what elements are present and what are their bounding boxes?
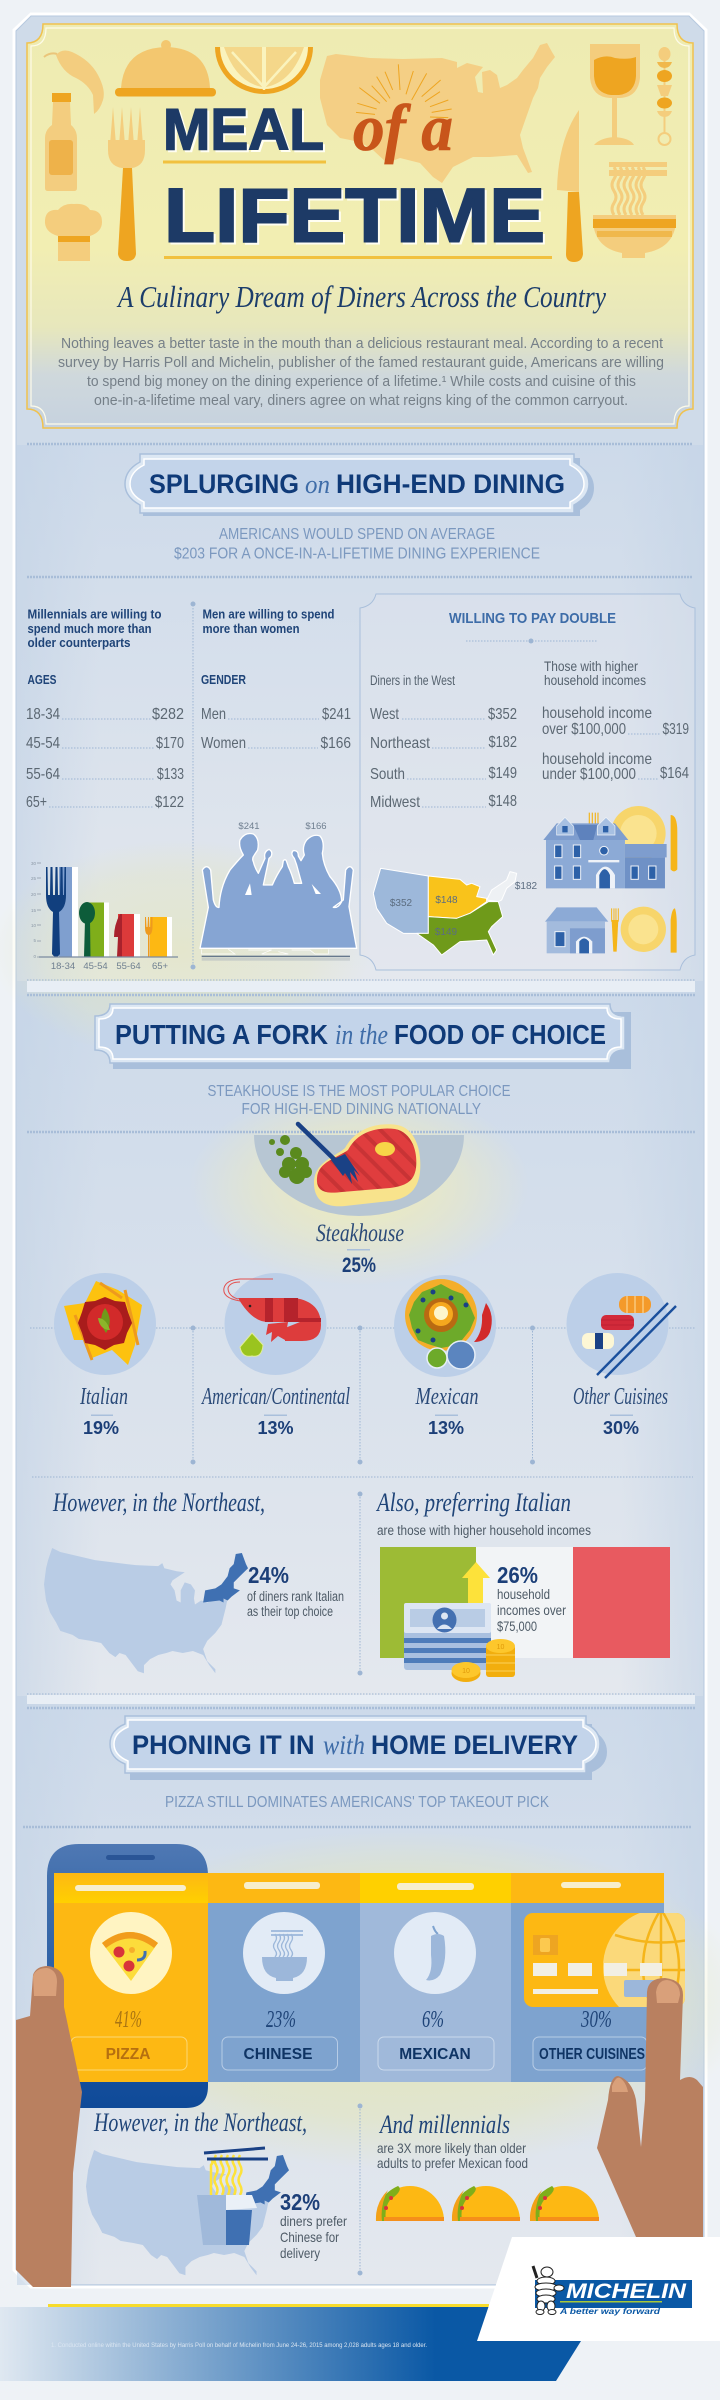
- chart glow: [0, 840, 370, 1060]
- ages intro text: older counterparts: [28, 635, 130, 650]
- gender table: $166: [320, 735, 351, 752]
- mexican button: [378, 2037, 494, 2070]
- northeast delivery heading: However, in the Northeast,: [93, 2108, 307, 2137]
- banner title: [149, 469, 565, 499]
- 24 percent: 24%: [248, 1562, 289, 1588]
- pizza percent: 41%: [115, 2007, 142, 2033]
- panel: ages: [26, 606, 184, 972]
- banner title: [115, 1019, 606, 1051]
- regions table: Northeast: [370, 735, 430, 752]
- panel: delivery app columns: [54, 1873, 719, 2082]
- title: of a: of a: [353, 92, 453, 165]
- regional spending map: $352: [390, 898, 413, 909]
- icon: cash stack and coins: 10: [497, 1644, 504, 1651]
- mexican percent: 6%: [422, 2007, 444, 2033]
- section divider: [27, 994, 695, 996]
- banner title: FOOD OF CHOICE: [394, 1019, 606, 1050]
- subtitle: A Culinary Dream of Diners Across the Country: [116, 279, 606, 314]
- banner title: HOME DELIVERY: [371, 1730, 578, 1760]
- italian label: 19%: [83, 1418, 119, 1438]
- gender heading: GENDER: [201, 672, 246, 687]
- italian flag: [380, 1547, 670, 1658]
- icon: steak with fork and peas: [269, 1124, 420, 1206]
- footer yellow line: [48, 2304, 489, 2307]
- bar chart: spend by age: 30: [31, 861, 36, 866]
- icon: shrimp with lime: [224, 1273, 326, 1375]
- icon: noodle bowl: [593, 162, 676, 258]
- header panel: [27, 24, 693, 428]
- section divider: [27, 576, 693, 578]
- section band: [27, 980, 695, 992]
- other button: [533, 2037, 647, 2070]
- couple silhouette labels: [238, 821, 327, 832]
- other percent: 30%: [580, 2007, 612, 2033]
- section 3 subheading: PIZZA STILL DOMINATES AMERICANS' TOP TAKEOUT PICK: [165, 1794, 550, 1811]
- couple silhouette labels: $166: [305, 821, 327, 832]
- icon: cash stack and coins: [404, 1603, 515, 1682]
- column: pizza: [54, 1873, 208, 2082]
- banner title: with: [323, 1730, 365, 1760]
- michelin logo card: [477, 2237, 720, 2341]
- icon: smartphone: [47, 1844, 208, 2108]
- footer band: [0, 2307, 581, 2381]
- ages table: [26, 706, 184, 811]
- icon: left hand: [16, 1966, 82, 2287]
- icon: michelin man: [533, 2266, 564, 2314]
- 32 percent caption: diners prefer: [280, 2213, 347, 2229]
- intro paragraph: Nothing leaves a better taste in the mouth than a delicious restaurant meal. According to a recent: [61, 336, 663, 352]
- icon: chili pepper: [44, 51, 104, 114]
- income column heading: [544, 659, 646, 688]
- steak plate half circle: [254, 1135, 464, 1216]
- cuisine labels: [79, 1384, 668, 1438]
- other label: Other Cuisines: [573, 1384, 668, 1410]
- other label: [573, 1384, 668, 1438]
- 32 percent: 32%: [280, 2189, 320, 2215]
- fork: [298, 1124, 360, 1184]
- up arrow: [462, 1562, 490, 1610]
- icon: sun rays: [356, 64, 452, 118]
- panel: gender: [200, 606, 357, 961]
- decorative dash: [347, 1249, 370, 1250]
- 26 percent: 26%: [497, 1562, 538, 1588]
- section divider: [27, 1707, 695, 1709]
- american label: [201, 1384, 350, 1438]
- region column heading: Diners in the West: [370, 673, 455, 688]
- column: mexican: [360, 1873, 511, 2082]
- decorative rule under lifetime: [164, 256, 552, 259]
- tagline: A better way forward: [559, 2306, 661, 2316]
- regions table: Midwest: [370, 794, 420, 811]
- bar chart: spend by age: 18-34: [51, 961, 75, 972]
- section divider: [27, 443, 693, 445]
- 24 percent caption: [247, 1589, 344, 1619]
- icon: skewer: [657, 47, 672, 145]
- icon: large house with plate: [543, 806, 677, 888]
- gender table: $241: [322, 706, 351, 723]
- 32 percent caption: Chinese for: [280, 2229, 339, 2245]
- pay double heading: WILLING TO PAY DOUBLE: [449, 610, 616, 627]
- section 3 banner: [110, 1716, 607, 1780]
- millennials heading: And millennials: [378, 2110, 510, 2139]
- regions table: $148: [488, 793, 517, 810]
- ages table: 65+: [26, 794, 47, 811]
- section divider: [23, 1826, 691, 1828]
- millennials caption: are 3X more likely than older: [377, 2140, 526, 2156]
- icon: knife: [557, 110, 583, 262]
- steak glow: [189, 1085, 529, 1285]
- michelin wordmark: MICHELIN: [566, 2280, 687, 2303]
- icon: hot sauce bottle: [45, 93, 77, 191]
- chinese percent: 23%: [266, 2007, 296, 2033]
- ages table: $133: [157, 766, 184, 783]
- pizza button: PIZZA: [106, 2046, 150, 2063]
- section 1 subheading: $203 FOR A ONCE-IN-A-LIFETIME DINING EXPERIENCE: [174, 546, 540, 562]
- income table: $164: [660, 765, 689, 782]
- 24 percent caption: as their top choice: [247, 1604, 333, 1619]
- intro paragraph: one-in-a-lifetime meal vary, diners agree on what reigns king of the common carryout.: [94, 393, 628, 409]
- income column heading: Those with higher: [544, 659, 638, 674]
- icon: small house with plate: [545, 907, 677, 953]
- regional spending map: $182: [515, 881, 538, 892]
- italian label: Italian: [79, 1384, 128, 1410]
- regions table: South: [370, 766, 405, 783]
- column divider: [190, 602, 196, 970]
- peas: [269, 1135, 312, 1184]
- mexican label: Mexican: [415, 1384, 478, 1410]
- ages intro text: [28, 606, 162, 650]
- map northeast highlighted: [44, 1548, 248, 1673]
- icon: sushi and chopsticks: [566, 1273, 676, 1378]
- banner title: PUTTING A FORK: [115, 1019, 328, 1050]
- icon: chili pepper: [426, 1926, 445, 1980]
- icon: italian pasta: [54, 1273, 156, 1375]
- panel: italian income: [375, 1488, 670, 1682]
- ages table: $170: [156, 735, 184, 752]
- column divider: [358, 1492, 362, 1676]
- pizza button: [71, 2037, 187, 2070]
- section band: [27, 1694, 695, 1704]
- icon: fork: [108, 107, 145, 261]
- 26 percent caption: household: [497, 1586, 550, 1602]
- income table: under $100,000: [542, 766, 636, 783]
- banner title: PHONING IT IN: [132, 1730, 314, 1760]
- decorative rule under meal: [163, 160, 326, 164]
- section 1 subheading: AMERICANS WOULD SPEND ON AVERAGE: [219, 526, 495, 543]
- income subheading: are those with higher household incomes: [377, 1523, 591, 1538]
- regional spending map: [373, 868, 538, 955]
- italian label: [79, 1384, 128, 1438]
- ages intro text: spend much more than: [28, 621, 152, 636]
- intro paragraph: [58, 336, 664, 409]
- bar chart: spend by age: 15: [31, 908, 36, 913]
- american label: American/Continental: [201, 1384, 350, 1410]
- chinese button: CHINESE: [244, 2046, 312, 2063]
- section 2 subheading: [208, 1083, 510, 1118]
- regions table: $352: [488, 706, 517, 723]
- income table: $319: [662, 721, 689, 738]
- regions table: [370, 706, 517, 811]
- ages table: $122: [155, 794, 184, 811]
- ages table: 18-34: [26, 706, 60, 723]
- american label: 13%: [257, 1418, 294, 1438]
- icon: mexican platter: [394, 1275, 496, 1377]
- icon: cash stack and coins: 10: [462, 1668, 470, 1675]
- panel: millennials: [376, 2110, 599, 2221]
- steakhouse percent: 25%: [342, 1254, 376, 1277]
- millennials caption: [377, 2140, 528, 2171]
- bar chart: spend by age: 45-54: [83, 961, 108, 972]
- column divider: [358, 2104, 362, 2276]
- banner title: [132, 1730, 578, 1760]
- bar chart: spend by age: 10: [31, 923, 36, 928]
- millennials caption: adults to prefer Mexican food: [377, 2155, 528, 2171]
- banner title: in the: [335, 1020, 388, 1051]
- gender intro text: Men are willing to spend: [202, 606, 335, 622]
- chinese button: [222, 2037, 338, 2070]
- other button: OTHER CUISINES: [539, 2046, 645, 2063]
- steakhouse label: Steakhouse: [316, 1220, 404, 1247]
- icon: right hand: [597, 1978, 703, 2237]
- section divider: [27, 1131, 695, 1133]
- 32 percent caption: delivery: [280, 2245, 320, 2261]
- footnote: 1. Conducted online within the United States by Harris Poll on behalf of Michelin from June 24-26, 2015 among 2,028 adults ages 18 and older.: [51, 2342, 427, 2349]
- michelin wordmark: [535, 2280, 692, 2308]
- regional spending map: $148: [435, 895, 458, 906]
- intro paragraph: survey by Harris Poll and Michelin, publisher of the famed restaurant guide, Americans are willing: [58, 355, 664, 371]
- couple silhouette labels: $241: [238, 821, 260, 832]
- section 1 banner: [125, 454, 594, 516]
- panel: northeast delivery: [86, 2108, 347, 2275]
- ages table: 45-54: [26, 735, 60, 752]
- income table: household income: [542, 751, 652, 768]
- ages intro text: Millennials are willing to: [28, 606, 162, 622]
- cuisine dividers: [30, 1326, 695, 1464]
- 26 percent caption: $75,000: [497, 1618, 537, 1634]
- regions table: West: [370, 706, 399, 723]
- income column heading: household incomes: [544, 673, 646, 688]
- bar chart: spend by age: 25: [31, 876, 36, 881]
- icon: cloche: [115, 40, 216, 96]
- dotted ornament: [466, 638, 597, 644]
- icon: credit card with globe: [524, 1913, 685, 2007]
- intro paragraph: to spend big money on the dining experience of a lifetime.¹ While costs and cuisine of this: [87, 374, 636, 390]
- banner title: HIGH-END DINING: [336, 469, 565, 499]
- income table: [542, 705, 689, 783]
- icon: wine glass: [590, 44, 640, 145]
- bar chart: spend by age: 5: [33, 938, 36, 943]
- icon: noodle bowl: [262, 1931, 307, 1981]
- gender intro text: more than women: [202, 621, 300, 636]
- ages table: 55-64: [26, 766, 60, 783]
- couple dining silhouette: [200, 833, 357, 961]
- icon: United States map: [320, 43, 555, 183]
- column: chinese: [208, 1873, 360, 2082]
- panel: willing to pay double: [360, 594, 695, 970]
- income table: over $100,000: [542, 721, 626, 738]
- gender table: [201, 706, 351, 752]
- section 2 subheading: STEAKHOUSE IS THE MOST POPULAR CHOICE: [208, 1083, 510, 1100]
- title: LIFETIME: LIFETIME: [164, 174, 545, 258]
- other label: 30%: [603, 1418, 639, 1438]
- icon: chef hat: [45, 204, 102, 261]
- map with takeout box: [86, 2148, 289, 2275]
- banner title: SPLURGING: [149, 469, 299, 499]
- gender table: Men: [201, 706, 226, 723]
- mexican label: 13%: [428, 1418, 464, 1438]
- mexican button: MEXICAN: [399, 2046, 471, 2063]
- mexican label: [415, 1384, 478, 1438]
- steak: [314, 1124, 420, 1206]
- bar chart: spend by age: 20: [31, 892, 36, 897]
- 32 percent caption: [280, 2213, 347, 2261]
- banner title: on: [305, 470, 330, 499]
- title: MEAL: MEAL: [163, 98, 324, 162]
- icon: lemon slice: [215, 47, 313, 94]
- regions table: $182: [488, 734, 517, 751]
- dotted rule: [32, 1476, 693, 1478]
- gender intro text: [202, 606, 335, 636]
- bar chart: spend by age: 0: [33, 954, 36, 959]
- section 2 banner: [95, 1004, 631, 1069]
- 24 percent caption: of diners rank Italian: [247, 1589, 344, 1604]
- regional spending map: $149: [435, 927, 458, 938]
- gender table: Women: [201, 735, 246, 752]
- bar chart: spend by age: [31, 861, 178, 972]
- icon: pizza slice: [102, 1932, 158, 1981]
- income heading: Also, preferring Italian: [375, 1488, 571, 1517]
- ages heading: AGES: [28, 672, 57, 687]
- bar chart: spend by age: 65+: [152, 961, 169, 972]
- income table: household income: [542, 705, 652, 722]
- delivery glow: [50, 1830, 720, 2170]
- column: other cuisines: [511, 1873, 685, 2082]
- 26 percent caption: [497, 1586, 566, 1634]
- ages table: $282: [152, 706, 184, 723]
- icon: tacos: [376, 2186, 599, 2221]
- panel: northeast italian: [44, 1488, 344, 1673]
- northeast heading: However, in the Northeast,: [52, 1488, 265, 1517]
- regions table: $149: [488, 765, 517, 782]
- section 1 subheading: [174, 526, 540, 562]
- 26 percent caption: incomes over: [497, 1602, 566, 1618]
- bar chart: spend by age: 55-64: [116, 961, 141, 972]
- section 2 subheading: FOR HIGH-END DINING NATIONALLY: [242, 1101, 481, 1118]
